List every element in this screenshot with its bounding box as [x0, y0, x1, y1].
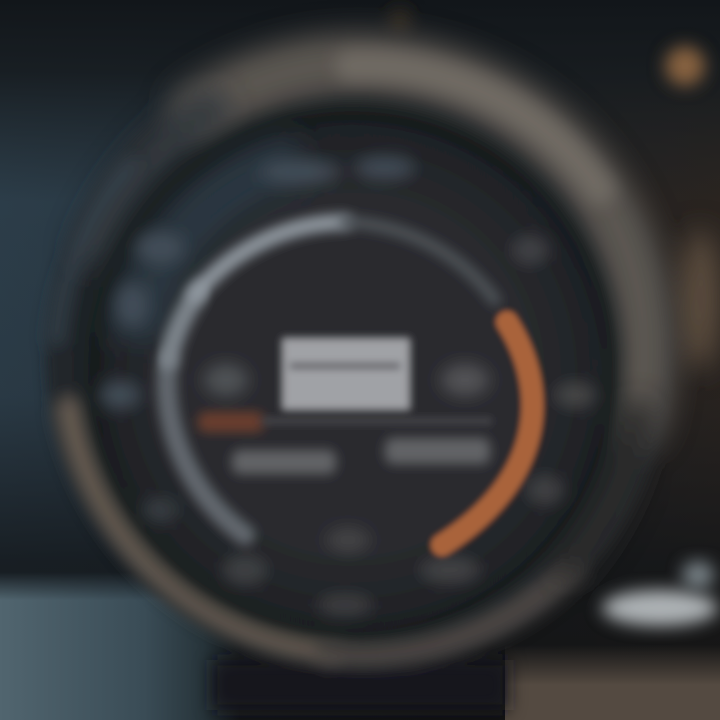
ring: right dark [570, 420, 635, 560]
grey gauge arc [167, 222, 495, 535]
gauge stand [212, 660, 508, 710]
background glow: warm bokeh lights [388, 8, 720, 370]
ring: bottom [330, 570, 570, 652]
small side readouts [204, 364, 489, 396]
table surface [0, 560, 720, 720]
white cloth on table [602, 561, 718, 626]
gauge body [46, 44, 670, 668]
red indicator bar [198, 412, 264, 432]
tick marks and scale labels (blurred) [100, 157, 595, 615]
outer ring base [46, 44, 670, 668]
lower labels [232, 438, 490, 474]
orange gauge arc [442, 322, 532, 545]
dial face [106, 128, 598, 620]
central digital readout [282, 338, 410, 410]
dial left blue tint [135, 160, 300, 340]
ring shade: left blue [56, 165, 130, 340]
ring highlight: upper bright [350, 66, 600, 190]
ring highlight: top right [200, 63, 644, 420]
ring shade: upper left [95, 110, 210, 250]
ring: lower left brown [70, 410, 330, 648]
divider line [262, 417, 492, 425]
inner dark band [96, 116, 608, 628]
